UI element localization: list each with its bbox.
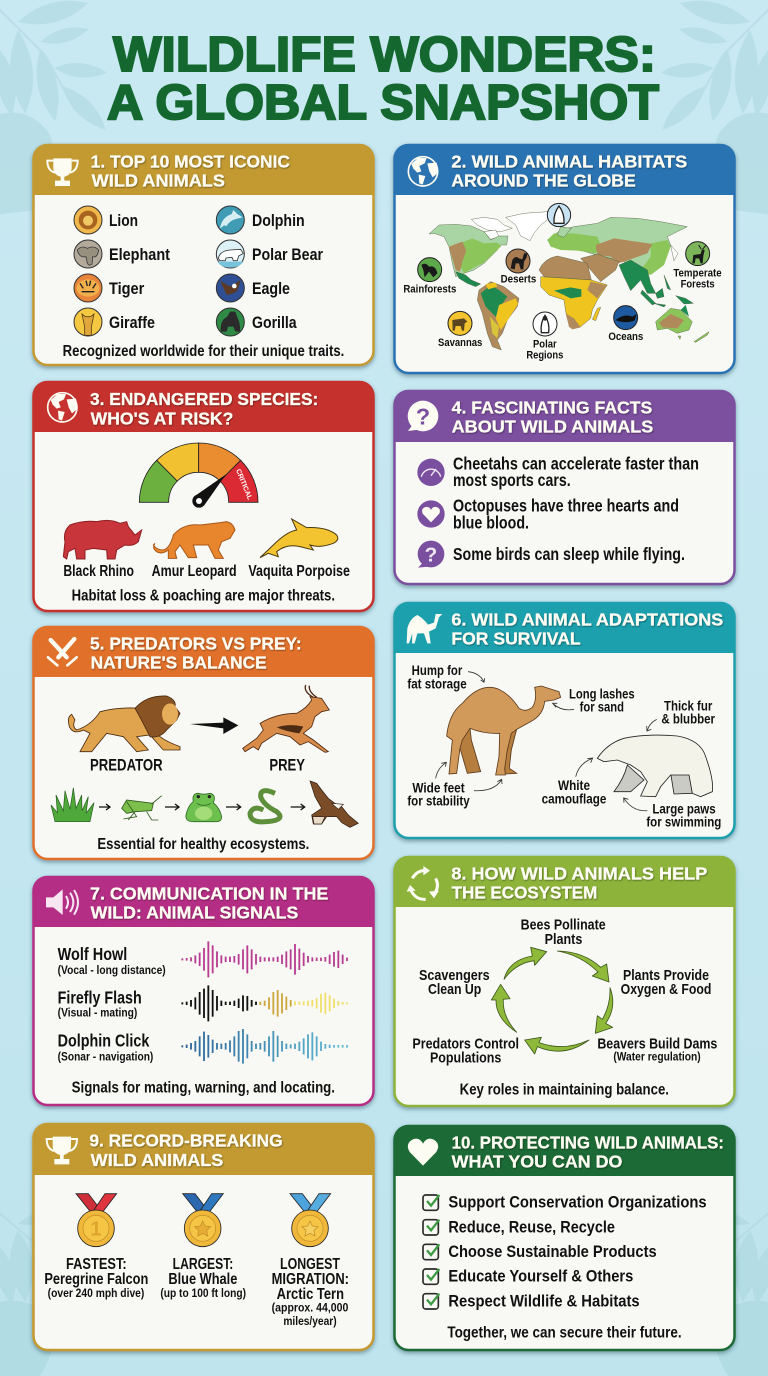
label: dolphin: Dolphin [252, 211, 305, 230]
label: oceans: Oceans [608, 331, 643, 343]
text: longest migration: miles/year) [283, 1315, 337, 1328]
signal: wolf howl: (Vocal - long distance) [58, 963, 166, 977]
icon: heart [417, 500, 445, 528]
heading: 6. WILD ANIMAL ADAPTATIONS [451, 610, 723, 630]
heading: ABOUT WILD ANIMALS [452, 417, 653, 437]
label: species names [63, 563, 350, 580]
world map [429, 212, 709, 350]
icon: frog [186, 793, 222, 822]
icon: eagle [310, 781, 358, 827]
heading: WHO'S AT RISK? [91, 408, 233, 428]
heading: 9. RECORD-BREAKING [89, 1131, 283, 1151]
heading: 10. PROTECTING WILD ANIMALS: [452, 1132, 724, 1152]
fact: birds: Some birds can sleep while flying. [453, 544, 685, 564]
signal: firefly flash [58, 987, 142, 1020]
panel: 1 top 10 iconic animals [33, 145, 374, 365]
item: respect wildlife: Respect Wildlife & Habitats [448, 1291, 640, 1310]
icon: trophy [47, 158, 78, 186]
panel: 5 predators vs prey [33, 627, 374, 859]
heading [91, 151, 290, 191]
heading: THE ECOSYSTEM [452, 883, 597, 903]
callouts: polar bear [542, 698, 721, 829]
heading: 3. ENDANGERED SPECIES: [90, 389, 318, 409]
label: beavers [597, 1036, 717, 1064]
callouts: camel [407, 662, 635, 809]
callouts: polar bear: camouflage [542, 790, 607, 806]
callouts: polar bear: White [558, 777, 590, 793]
icon: question: ? [425, 544, 437, 567]
icon: question [418, 541, 444, 568]
arrow [165, 804, 179, 810]
signal: dolphin click [58, 1031, 153, 1064]
callouts: camel: Hump for [412, 662, 463, 678]
signal: firefly flash: (Visual - mating) [58, 1006, 137, 1020]
label: bees [521, 916, 606, 948]
label: species names: Amur Leopard [152, 563, 237, 580]
heading: AROUND THE GLOBE [451, 171, 636, 191]
label: temperate forests: Forests [681, 278, 715, 290]
food chain [51, 781, 358, 827]
heading: NATURE'S BALANCE [91, 653, 267, 673]
fact: octopuses: Octopuses have three hearts and [453, 496, 679, 516]
label: polar regions [526, 338, 563, 361]
caption: Recognized worldwide for their unique traits. [63, 343, 344, 360]
panel: 8 ecosystem [394, 857, 735, 1106]
text: longest migration [272, 1256, 349, 1328]
signal: wolf howl: Wolf Howl [58, 944, 127, 964]
heading: 4. FASCINATING FACTS [452, 397, 652, 417]
text: largest: LARGEST: [173, 1256, 233, 1273]
heading: FOR SURVIVAL [451, 629, 581, 649]
label: bees: Bees Pollinate [521, 916, 606, 933]
arrow [291, 804, 305, 810]
medal: fastest [76, 1194, 117, 1247]
arrow [99, 804, 110, 810]
text: largest [160, 1256, 246, 1300]
text: largest: (up to 100 ft long) [160, 1287, 246, 1300]
label: bees: Plants [545, 931, 582, 948]
label: predators [412, 1036, 519, 1067]
text: fastest: Peregrine Falcon [44, 1271, 148, 1288]
heading [89, 1131, 283, 1170]
heading [90, 389, 318, 428]
caption: Signals for mating, warning, and locating. [72, 1080, 335, 1097]
caption: Habitat loss & poaching are major threats. [72, 588, 335, 605]
heading: 8. HOW WILD ANIMALS HELP [451, 863, 707, 883]
label: scavengers: Clean Up [428, 981, 481, 998]
icon: grasshopper [122, 796, 162, 820]
label: plants [621, 967, 711, 998]
icon: camel [407, 614, 442, 643]
callouts: camel: for sand [580, 699, 624, 715]
label: predator: PREDATOR [90, 756, 163, 775]
panel: 6 adaptations [394, 603, 735, 838]
item: reduce reuse recycle: Reduce, Reuse, Recycle [448, 1217, 615, 1236]
panel: 9 record-breaking [33, 1124, 374, 1350]
heading: WILD: ANIMAL SIGNALS [91, 903, 298, 923]
icon: lion predator [68, 696, 180, 752]
label: giraffe: Giraffe [109, 313, 155, 332]
icon: vaquita porpoise [260, 519, 338, 558]
label: polar bear: Polar Bear [252, 245, 323, 264]
icon: trophy [47, 1137, 77, 1164]
icon: deserts [506, 249, 530, 273]
callouts: camel: for stability [407, 793, 470, 809]
medal: largest [183, 1194, 223, 1247]
label: prey: PREY [269, 756, 305, 775]
label: temperate forests [673, 268, 722, 290]
icon: oceans [614, 306, 638, 330]
medal: longest migration [290, 1194, 331, 1247]
label: plants: Oxygen & Food [621, 981, 711, 998]
label: beavers: (Water regulation) [613, 1051, 701, 1064]
signal: dolphin click: (Sonar - navigation) [58, 1050, 153, 1064]
label: eagle: Eagle [252, 279, 290, 298]
label: scavengers: Scavengers [419, 967, 490, 984]
fact: octopuses: blue blood. [453, 512, 529, 532]
text: longest migration: MIGRATION: [272, 1271, 349, 1288]
heading: 5. PREDATORS VS PREY: [90, 633, 302, 653]
icon: grass [51, 788, 94, 822]
signal: wolf howl [58, 944, 166, 977]
heading: WHAT YOU CAN DO [452, 1152, 622, 1172]
waveform: dolphin click [182, 1029, 347, 1064]
cycle diagram arrows [491, 947, 613, 1054]
callouts: polar bear: & blubber [661, 711, 715, 727]
icon: speedometer [417, 459, 445, 486]
icon: dolphin [216, 206, 244, 234]
icon: amur leopard [153, 522, 235, 558]
heading [90, 633, 302, 673]
icon: cycle arrows [407, 866, 439, 899]
heading: 7. COMMUNICATION IN THE [90, 883, 328, 903]
label: rainforests: Rainforests [403, 283, 456, 295]
callouts: polar bear: Large paws [652, 800, 716, 816]
medal: fastest: 1 [90, 1219, 102, 1241]
gauge [139, 443, 258, 508]
fact: cheetahs [453, 453, 699, 490]
heading [451, 610, 723, 649]
icon: heart [408, 1139, 438, 1166]
icon: temperate forests [686, 242, 710, 266]
icon: lion [74, 206, 102, 234]
item: sustainable products: Choose Sustainable Products [448, 1242, 657, 1261]
heading [452, 1132, 724, 1172]
icon: crossed swords [48, 639, 77, 665]
icon: elephant [74, 240, 102, 268]
text: fastest: FASTEST: [66, 1256, 127, 1273]
label: polar regions: Polar [533, 338, 557, 350]
icon: globe [48, 393, 78, 422]
fact: octopuses [453, 496, 679, 532]
label: polar regions: Regions [526, 349, 563, 361]
label: predators: Populations [430, 1050, 501, 1067]
panel: 3 endangered species [33, 382, 374, 611]
label: predators: Predators Control [412, 1036, 519, 1053]
callouts: polar bear: Thick fur [664, 698, 713, 714]
caption: Key roles in maintaining balance. [460, 1081, 669, 1098]
label: deserts: Deserts [501, 274, 536, 286]
panel: 2 habitats [394, 145, 735, 373]
icon: speaker [46, 889, 78, 915]
label: tiger: Tiger [109, 279, 145, 298]
heading: WILD ANIMALS [92, 171, 225, 191]
heading [451, 151, 687, 191]
panel: 10 protecting [394, 1126, 735, 1350]
icon: gazelle prey [243, 685, 329, 752]
icon: savannas [448, 311, 472, 335]
text: largest: Blue Whale [168, 1271, 237, 1288]
gauge: CRITICAL [234, 468, 253, 502]
label: elephant: Elephant [109, 245, 170, 264]
fact: cheetahs: Cheetahs can accelerate faster than [453, 453, 699, 473]
caption: Essential for healthy ecosystems. [97, 836, 309, 853]
title: WILDLIFE WONDERS: [113, 28, 656, 82]
label: beavers: Beavers Build Dams [597, 1036, 717, 1053]
label: temperate forests: Temperate [673, 268, 722, 280]
panel: 7 communication [33, 877, 374, 1105]
heading: 1. TOP 10 MOST ICONIC [91, 151, 290, 171]
icon: rainforests [418, 258, 442, 282]
label: lion: Lion [109, 211, 138, 230]
panel: 4 fascinating facts [394, 391, 735, 584]
item: educate: Educate Yourself & Others [448, 1267, 633, 1286]
callouts: camel: Long lashes [569, 686, 635, 702]
illustration: camel [447, 686, 561, 775]
text: longest migration: LONGEST [280, 1256, 341, 1273]
arrow: predator to prey [190, 717, 238, 734]
label: savannas: Savannas [438, 337, 482, 349]
fact: cheetahs: most sports cars. [453, 470, 571, 490]
label: plants: Plants Provide [623, 967, 709, 984]
icon: tiger [74, 274, 102, 302]
heading [451, 863, 707, 903]
icon: question bubble [408, 401, 438, 431]
text: longest migration: (approx. 44,000 [272, 1302, 348, 1315]
icon: eagle [216, 274, 244, 302]
heading [452, 397, 653, 437]
signal: firefly flash: Firefly Flash [58, 987, 142, 1007]
icon: black rhino [63, 520, 142, 559]
text: longest migration: Arctic Tern [277, 1286, 344, 1303]
item: support conservation: Support Conservation Organizations [448, 1193, 707, 1212]
label: gorilla: Gorilla [252, 313, 297, 332]
waveform: wolf howl [182, 941, 347, 977]
icon: snake [250, 791, 280, 822]
callouts: camel: fat storage [407, 675, 467, 691]
heading: WILD ANIMALS [91, 1150, 223, 1170]
heading [90, 883, 328, 923]
title [107, 28, 659, 130]
callouts: polar bear: for swimming [646, 813, 721, 829]
signal: dolphin click: Dolphin Click [58, 1031, 150, 1051]
label: scavengers [419, 967, 490, 998]
icon: polar regions [533, 312, 557, 336]
icon: giraffe [74, 308, 102, 336]
callouts: camel: Wide feet [412, 779, 465, 795]
text: fastest [44, 1256, 148, 1300]
label: species names: Vaquita Porpoise [248, 563, 350, 580]
icon: polar bear [216, 240, 244, 268]
text: fastest: (over 240 mph dive) [48, 1287, 144, 1300]
label: species names: Black Rhino [63, 563, 134, 580]
caption: Together, we can secure their future. [447, 1325, 682, 1342]
icon: question bubble: ? [416, 403, 430, 429]
illustration: polar bear [597, 735, 713, 797]
heading: 2. WILD ANIMAL HABITATS [451, 151, 687, 171]
arrow [226, 804, 241, 810]
icon: gorilla [216, 308, 244, 336]
icon: globe [408, 157, 438, 186]
waveform: firefly flash [182, 985, 347, 1021]
icon: penguin top [547, 203, 571, 227]
title: A GLOBAL SNAPSHOT [107, 76, 659, 130]
